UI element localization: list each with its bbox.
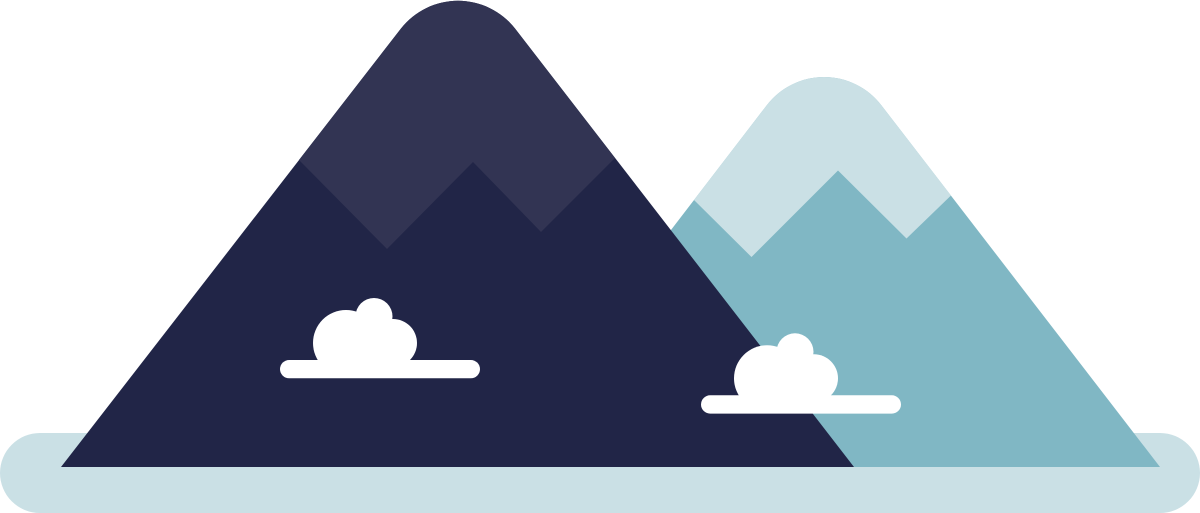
right cloud [701, 333, 901, 414]
left mountain body [61, 1, 854, 467]
right mountain body [489, 77, 1160, 467]
right cloud base bar [701, 395, 901, 414]
right mountain [489, 77, 1160, 467]
right mountain snow cap [694, 77, 951, 257]
left mountain snow cap [299, 1, 615, 249]
left cloud [280, 298, 480, 378]
right cloud puffs [734, 333, 838, 411]
left mountain [61, 1, 854, 467]
left cloud puffs [313, 298, 417, 376]
ground band [0, 433, 1200, 513]
left cloud base bar [280, 360, 480, 378]
